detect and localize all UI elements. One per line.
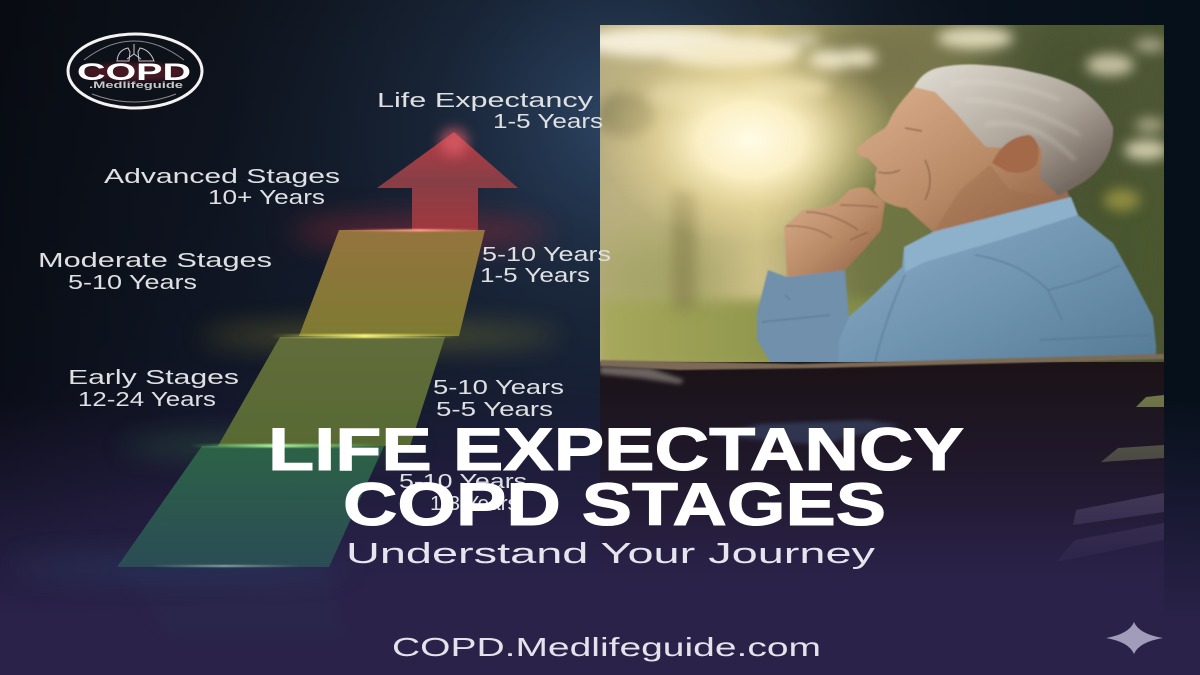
label: advanced values (480, 243, 611, 287)
highlight red (340, 229, 485, 232)
label: advanced values: 5-10 Years (482, 243, 611, 266)
label: moderate stages: Moderate Stages (38, 249, 272, 272)
label: life expectancy: Life Expectancy (377, 89, 594, 112)
cheek shading (942, 166, 1001, 220)
man (757, 64, 1156, 365)
label: advanced stages: 10+ Years (208, 186, 325, 209)
logo wordmark (77, 59, 191, 91)
label: life expectancy (377, 89, 603, 133)
label: advanced values: 1-5 Years (480, 264, 590, 287)
bench (600, 354, 1164, 549)
shirt folds (874, 254, 1120, 362)
neck and face (856, 87, 1071, 232)
reflection (117, 567, 350, 640)
label: advanced stages: Advanced Stages (104, 165, 340, 188)
arrow (377, 132, 518, 230)
label: early values: 1-3 Years (430, 492, 518, 515)
label: advanced stages (104, 165, 340, 209)
icon: lungs (117, 44, 154, 61)
hand (784, 187, 885, 277)
label: early stages: 12-24 Years (78, 388, 216, 411)
stage glow green (120, 438, 420, 454)
park background with bokeh (600, 25, 1164, 362)
highlight teal (150, 565, 300, 567)
stage glow blue (10, 557, 350, 577)
eye and mouth marks (878, 128, 930, 200)
step: advanced (299, 230, 485, 336)
hair (914, 64, 1113, 196)
step: early (117, 446, 384, 567)
subtitle: Understand Your Journey (346, 538, 876, 570)
highlight yellow (270, 334, 460, 338)
highlight green (190, 444, 380, 448)
title: LIFE EXPECTANCY (268, 416, 964, 483)
photo: older man on a park bench (600, 25, 1164, 566)
sleeve (757, 270, 849, 365)
collar (904, 197, 1078, 272)
ear (992, 135, 1039, 173)
label: early stages: Early Stages (68, 366, 239, 389)
stage glow yellow (200, 327, 560, 345)
step: moderate (218, 337, 445, 446)
staircase chart (10, 128, 560, 640)
title: COPD STAGES (343, 471, 886, 538)
right labels: life expectancy values (377, 89, 611, 515)
title (268, 416, 964, 538)
cuff line (762, 295, 830, 322)
red glow at arrow tip (440, 128, 468, 156)
logo wordmark: .Medlifeguide (89, 80, 183, 91)
label: moderate values: 5-5 Years (436, 398, 553, 421)
hair highlight strands (992, 90, 1080, 160)
label: moderate stages (38, 249, 272, 294)
logo wordmark: COPD (77, 59, 191, 86)
shirt (837, 214, 1157, 362)
stage glow red (290, 216, 550, 248)
label: moderate stages: 5-10 Years (68, 271, 197, 294)
label: moderate values (433, 376, 564, 421)
icon: sparkle star (1106, 622, 1163, 654)
bottom fade (600, 395, 1164, 615)
left labels: stage names (38, 165, 340, 411)
label: moderate values: 5-10 Years (433, 376, 564, 399)
label: early values: 5-10 Years (399, 470, 527, 493)
label: early values (399, 470, 527, 515)
logo (68, 34, 202, 108)
website url: COPD.Medlifeguide.com (392, 632, 821, 662)
finger lines (786, 205, 878, 240)
label: life expectancy: 1-5 Years (493, 110, 603, 133)
label: early stages (68, 366, 239, 411)
